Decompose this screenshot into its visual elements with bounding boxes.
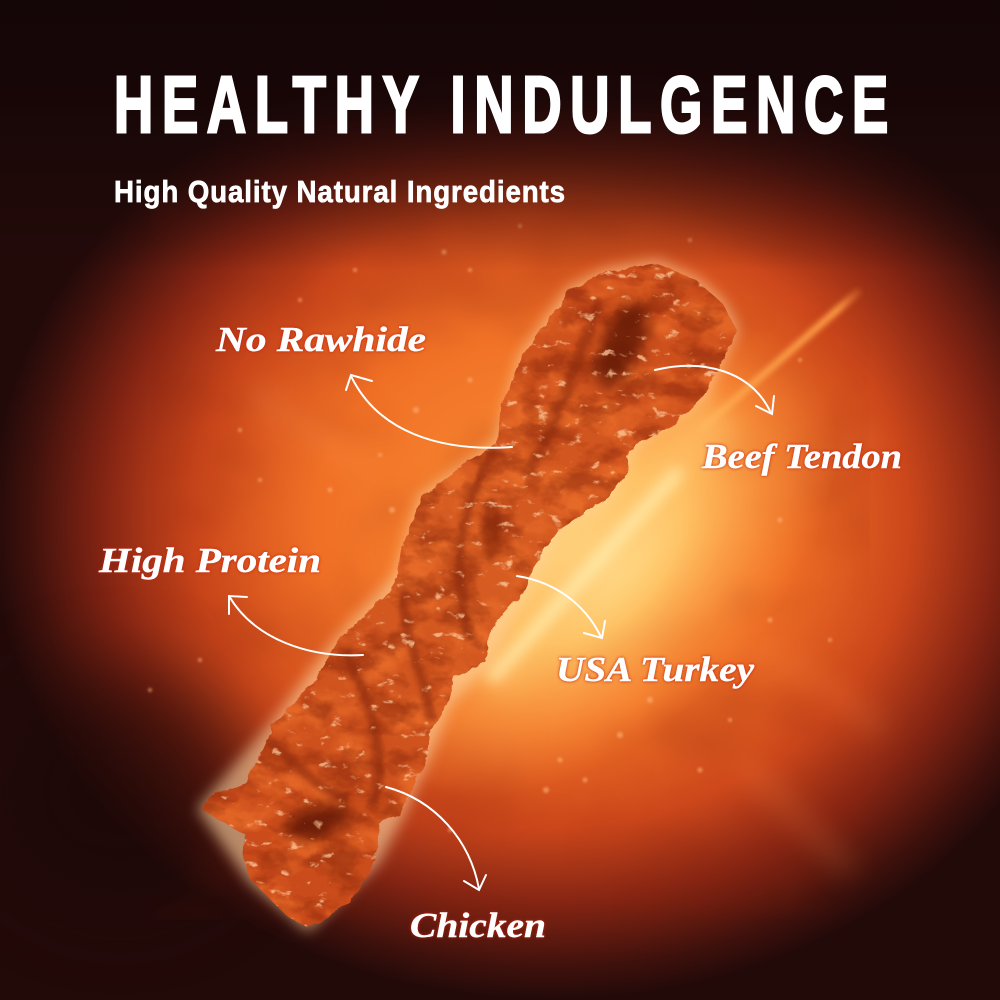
callout: Chicken <box>386 787 546 945</box>
label: Chicken: Chicken <box>410 906 546 945</box>
label: Beef Tendon: Beef Tendon <box>701 437 902 476</box>
subtitle: High Quality Natural Ingredients <box>114 174 566 209</box>
treat: twisted chicken and beef tendon chew <box>202 264 737 927</box>
label: USA Turkey: USA Turkey <box>556 650 755 689</box>
callout: USA Turkey <box>517 576 755 689</box>
arrow: Chicken <box>386 787 486 890</box>
arrow: High Protein <box>229 596 363 655</box>
arrow: Beef Tendon <box>655 366 774 414</box>
callout: High Protein <box>98 541 363 655</box>
arrow: USA Turkey <box>517 576 605 638</box>
label: No Rawhide: No Rawhide <box>215 320 426 359</box>
callout: Beef Tendon <box>655 366 902 476</box>
arrow: No Rawhide <box>346 375 512 448</box>
glow behind treat <box>201 263 736 928</box>
callout: No Rawhide <box>215 320 512 448</box>
label: High Protein: High Protein <box>98 541 321 580</box>
